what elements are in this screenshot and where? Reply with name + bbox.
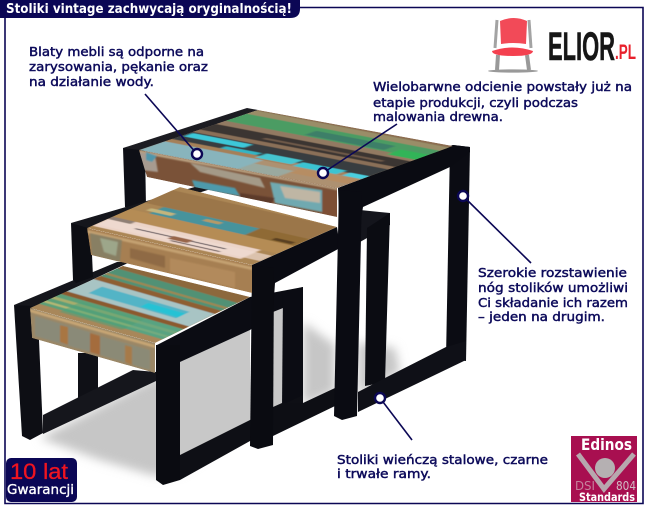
- callout: legs spacing: nóg stolików umożliwi: [478, 280, 628, 295]
- small table left leg: [14, 305, 43, 440]
- badge: Edinos standards: [571, 435, 637, 504]
- medium table side rail: [252, 227, 340, 312]
- shadow inside small table frame: [180, 330, 250, 455]
- callout: colours: Wielobarwne odcienie powstały już na: [373, 79, 632, 94]
- badge: Edinos standards: Standards: [579, 490, 635, 504]
- large table bottom bar: [358, 341, 466, 412]
- callout: table tops: Blaty mebli są odporne na: [29, 44, 204, 59]
- table: large, rear parts: [123, 108, 470, 207]
- small table back rail: [14, 262, 130, 308]
- medium table top: [87, 187, 337, 265]
- small table rear leg and bar: [78, 353, 98, 402]
- small table front edge: [30, 308, 155, 373]
- table: medium: [71, 184, 390, 449]
- medium table back rail: [71, 184, 214, 228]
- floor shadow: [40, 322, 400, 476]
- small table top: [30, 261, 250, 343]
- callout: colours: etapie produkcji, czyli podczas: [373, 95, 578, 110]
- medium table front edge: [87, 228, 252, 293]
- medium table left leg: [71, 223, 93, 283]
- large table front edge: [139, 150, 337, 217]
- badge: Edinos standards: Edinos: [581, 435, 632, 454]
- callout: steel frames: i trwałe ramy.: [337, 466, 431, 481]
- header bar: [0, 0, 300, 18]
- heading: Stoliki vintage zachwycają oryginalnością!: [6, 2, 292, 17]
- badge: 10 years warranty: 10 lat: [10, 459, 68, 484]
- badge: 10 years warranty: [6, 458, 77, 502]
- large table side bar: [338, 145, 470, 240]
- callout: legs spacing: Ci składanie ich razem: [478, 295, 628, 310]
- callout: legs spacing: Szerokie rozstawienie: [478, 265, 627, 280]
- large table top: [139, 110, 453, 188]
- badge: Edinos standards: DSI: [575, 479, 595, 493]
- shadow beside medium leg: [273, 304, 283, 407]
- icon: red chair: [488, 18, 538, 73]
- logo: Elior: .PL: [615, 41, 636, 64]
- large table right leg: [446, 147, 470, 361]
- table: small: [14, 261, 303, 485]
- badge: 10 years warranty: Gwarancji: [7, 483, 74, 498]
- callout: table tops: [29, 44, 208, 159]
- callout: steel frames: [337, 393, 548, 481]
- small table right leg: [282, 287, 303, 408]
- medium table front leg: [250, 265, 274, 449]
- callout: colours: malowania drewna.: [373, 109, 503, 124]
- medium table right leg: [365, 213, 390, 386]
- large table front leg: [334, 190, 362, 420]
- callout: legs spacing: [458, 191, 628, 324]
- badge: Edinos standards: 804: [616, 479, 636, 493]
- small table bottom rail: [180, 395, 303, 480]
- callout: table tops: zarysowania, pękanie oraz: [29, 59, 208, 74]
- logo: Elior: [488, 18, 636, 73]
- callout: table tops: na działanie wody.: [29, 74, 154, 89]
- medium table bottom rail: [273, 388, 335, 436]
- callout: colours: [318, 79, 632, 178]
- small table front leg: [156, 345, 180, 485]
- table: large: [139, 110, 470, 420]
- callout: steel frames: Stoliki wieńczą stalowe, czarne: [337, 452, 548, 467]
- callout: legs spacing: – jeden na drugim.: [478, 309, 605, 324]
- small table side rail: [157, 287, 303, 376]
